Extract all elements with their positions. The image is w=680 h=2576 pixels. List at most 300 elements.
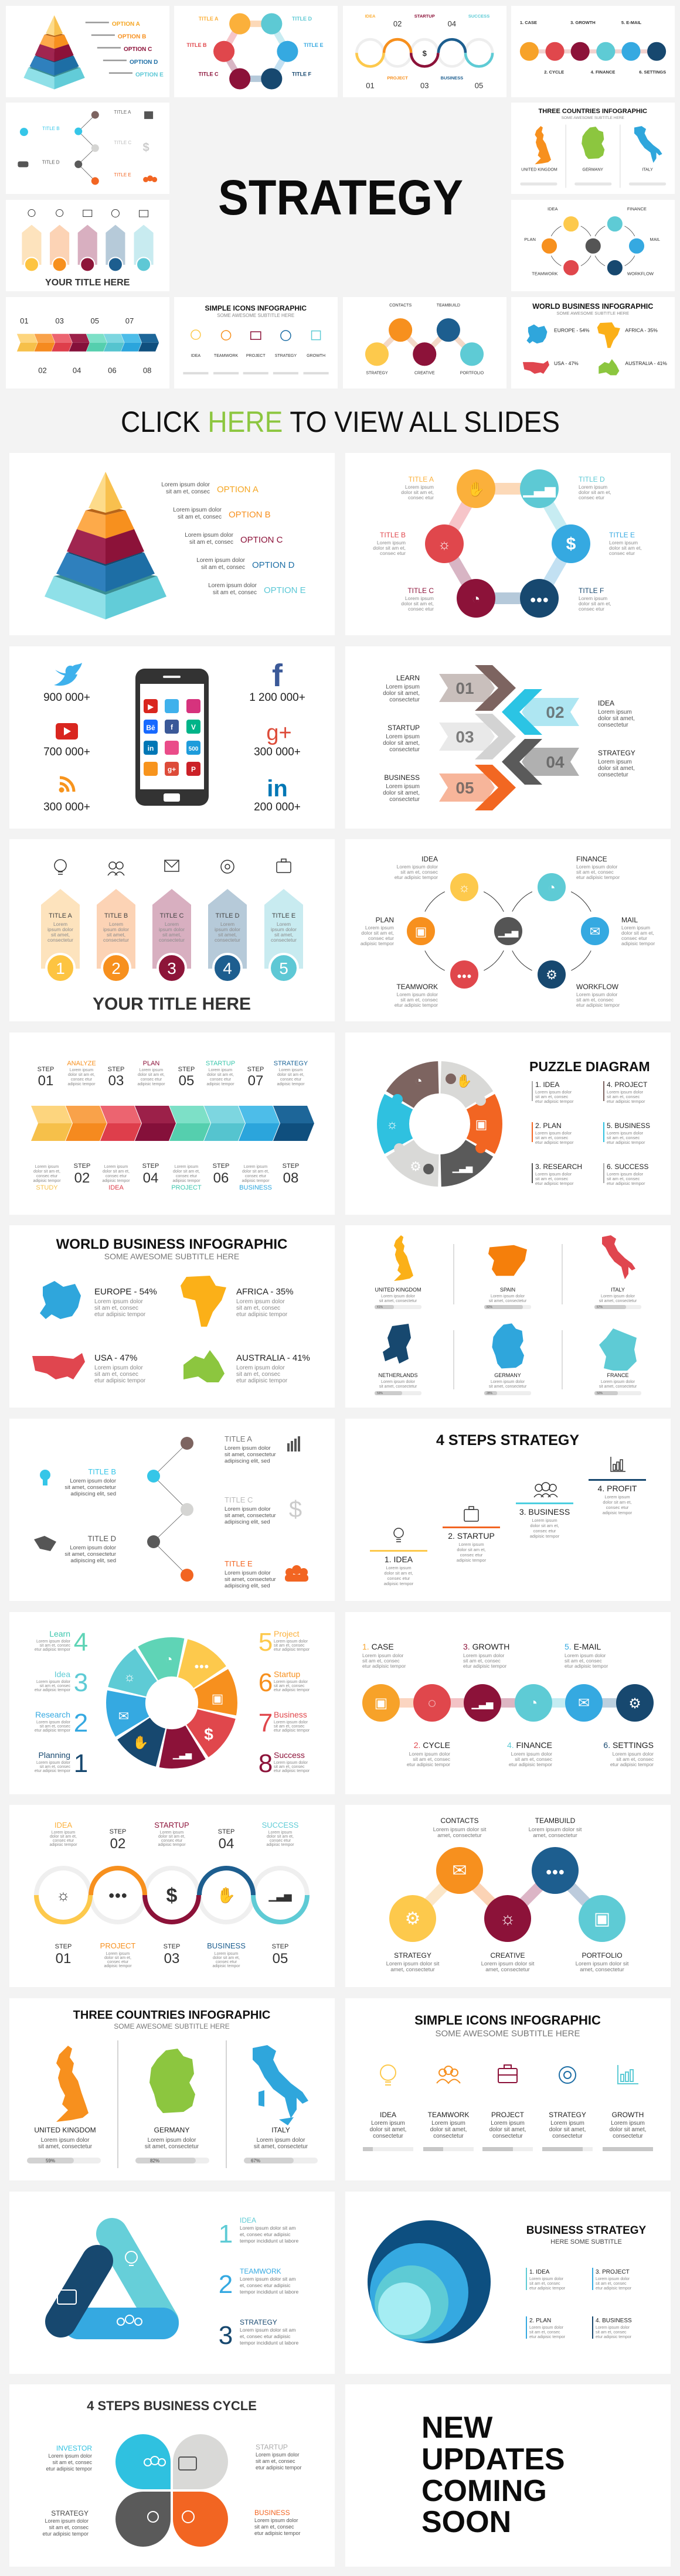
tree labels: TITLE C [225,1495,253,1504]
puzzle items: Lorem ipsum dolor [607,1130,644,1136]
numbered list: Lorem ipsum dolor sit am [240,2327,295,2333]
country labels and bars: Lorem ipsum dolor [491,1380,525,1384]
tree labels: TITLE B [88,1467,116,1476]
top labels: consec etur [161,1839,183,1843]
node labels: etur adipisic tempor [576,1002,620,1008]
country labels and bars: 67% [597,1306,603,1309]
ring labels: TITLE B [380,531,406,539]
icon labels: dolor sit amet, [370,2127,406,2133]
bottom labels: etur adipisic tempor [407,1761,450,1767]
bottom step labels: consec etur [106,1174,127,1178]
icon: phone with apps: 500 [189,746,199,752]
labels: amet, consectetur [437,1832,482,1839]
ring nodes: ▁▃▅ [522,482,556,498]
numbered list: Lorem ipsum dolor sit am [240,2225,295,2231]
top labels: Lorem ipsum [52,1831,75,1835]
labels: TEAMBUILD [535,1817,576,1825]
small card: pyramid: OPTION C [124,46,152,53]
progress bars: 59% [46,2158,55,2163]
strategy items: Lorem ipsum dolor [596,2277,630,2281]
network nodes: ●●● [457,971,472,980]
country labels and bars: 82% [487,1306,493,1309]
strategy items: etur adipisic tempor [529,2287,566,2291]
option labels: sit am et, consec [213,590,257,596]
ring labels: consec etur [408,606,434,612]
network circles: ⚙ [405,1909,420,1928]
arrow columns: consectetur [215,937,240,943]
network circles [389,1847,625,1942]
region stats: EUROPE - 54% [94,1287,157,1297]
arrow columns: TITLE D [216,912,240,919]
ring labels: dolor sit am et, [373,545,406,551]
bottom labels: adipisic tempor [104,1964,132,1968]
small card: idea ring: PLAN [524,237,536,242]
small card: ring diagram: TITLE B [186,42,207,48]
small card: three countries [511,103,675,194]
puzzle ring: ✋ [456,1074,472,1088]
cycle labels: Lorem ipsum dolor [48,2453,92,2459]
top step labels: adipisic tempor [277,1082,305,1086]
icon labels: consectetur [373,2133,404,2139]
bottom labels: Lorem ipsum [215,1952,238,1956]
top step labels: STEP [178,1066,195,1073]
tree labels: Lorem ipsum dolor [225,1570,271,1576]
cycle labels: sit am et, consec [52,2459,92,2465]
panel: 8 segment cycle [9,1612,335,1794]
step labels: 1. IDEA [385,1555,413,1564]
top labels: dolor sit am et, [50,1835,77,1839]
progress bars [363,2147,653,2151]
option labels: sit am et, consec [189,539,233,546]
step labels: adipisic tempor [530,1534,560,1539]
arrow columns: consectetur [159,937,185,943]
small card: world business: SOME AWESOME SUBTITLE HERE [556,311,629,316]
left labels: Lorem ipsum dolor [36,1680,71,1684]
icons [34,1436,308,1582]
bottom labels: PROJECT [100,1941,135,1950]
network nodes: ▣ [415,924,427,939]
cycle segments: ✋ [132,1735,149,1750]
country labels and bars: Lorem ipsum dolor [491,1294,525,1299]
country labels and bars [375,1287,641,1395]
timeline circles [362,1684,654,1722]
right labels: Business [274,1710,307,1719]
cycle segments: ▁▃▅ [172,1750,192,1760]
panel: 8 steps chevron bar [9,1033,335,1215]
arrow columns: sit amet, [218,932,237,938]
small card: pyramid: OPTION B [118,34,146,40]
ring nodes [425,469,590,618]
top labels: 04 [219,1836,234,1852]
connectors [413,1870,602,1919]
small card: contacts: TEAMBUILD [437,304,460,308]
small card: idea ring: FINANCE [627,206,647,212]
right labels: etur adipisic tempor [274,1688,310,1692]
puzzle items: sit am et, consec [607,1094,640,1099]
timeline circles: ▣ [375,1695,387,1711]
top step labels: STARTUP [206,1060,235,1067]
arrow columns: TITLE A [49,912,73,919]
number circles: 1 [56,959,65,977]
small card: pyramid: OPTION A [112,21,140,28]
subtitle: HERE SOME SUBTITLE [550,2238,622,2246]
step labels: Lorem ipsum [386,734,420,740]
top labels: STARTUP [154,1821,189,1829]
left labels: Planning [39,1750,70,1760]
panel: idea ring network [345,839,671,1021]
strategy items: 3. PROJECT [596,2269,630,2275]
icon labels: dolor sit amet, [430,2127,467,2133]
node labels: adipisic tempor [361,941,394,946]
step labels: dolor sit amet, [383,790,420,796]
puzzle items: 1. IDEA [535,1081,559,1089]
top labels: sit am et, consec [463,1658,501,1664]
icon: linkedin: in [267,776,288,802]
labels: Lorem ipsum dolor sit [386,1961,440,1967]
strategy items: sit am et, consec [529,2282,560,2286]
labels: CREATIVE [490,1951,525,1960]
top labels: STEP [218,1828,234,1835]
region stats: sit am et, consec [94,1305,138,1311]
node labels: TEAMWORK [396,983,438,991]
top labels: consec etur [270,1839,291,1843]
cycle segments: ☼ [124,1669,135,1684]
icon: phone with apps [135,669,209,806]
ring labels: Lorem ipsum [405,595,434,601]
small card: world business: USA - 47% [554,360,579,366]
bottom step labels: adipisic tempor [172,1179,200,1183]
cycle labels: BUSINESS [254,2509,290,2517]
timeline circles: ✉ [578,1695,590,1711]
labels: amet, consectetur [533,1832,577,1839]
option labels: OPTION A [217,485,259,495]
step labels: IDEA [598,699,614,707]
node labels: Lorem ipsum [621,925,650,931]
bottom labels: 01 [56,1951,71,1967]
cycle labels: Lorem ipsum dolor [45,2518,89,2524]
panel: 4 steps strategy [345,1419,671,1601]
arrow columns: Lorem [277,921,291,927]
bottom labels: 4. FINANCE [507,1740,552,1750]
cycle segments: ●●● [194,1661,209,1671]
icon labels: IDEA [380,2111,396,2119]
node labels: PLAN [376,916,394,924]
puzzle items: Lorem ipsum dolor [535,1130,572,1136]
bottom labels: sit am et, consec [413,1756,451,1762]
region stats: Lorem ipsum dolor [94,1299,143,1305]
small card: idea steps: IDEA [365,13,376,19]
arrow columns: Lorem [220,921,234,927]
left labels: etur adipisic tempor [35,1648,71,1652]
node labels: IDEA [421,855,438,863]
small card: 8 steps chevrons: 03 [55,316,64,325]
heading: YOUR TITLE HERE [93,994,251,1014]
arrow columns: sit amet, [274,932,293,938]
small card: 8 steps chevrons: 06 [108,366,117,374]
labels: PORTFOLIO [582,1951,623,1960]
small card: 8 steps chevrons: 02 [38,366,47,374]
top labels: consec etur [53,1839,74,1843]
map: france [599,1328,637,1371]
small card: case circles: 4. FINANCE [591,69,615,74]
bottom labels: sit am et, consec [515,1756,553,1762]
map: europe [40,1281,81,1319]
ring nodes: ☼ [438,537,451,553]
node labels: etur adipisic tempor [576,874,620,880]
outline icons [380,2065,638,2085]
progress bars [27,2158,318,2163]
left labels: 1 [74,1749,88,1778]
small card: ring diagram [174,6,338,97]
tree labels: TITLE D [88,1534,116,1543]
puzzle items: 3. RESEARCH [535,1163,582,1171]
option labels: Lorem ipsum dolor [208,582,257,589]
small card: titles tree [6,103,169,194]
puzzle items: sit am et, consec [607,1135,640,1140]
map: netherlands [383,1324,411,1364]
right labels: Project [274,1629,300,1638]
bottom step labels: STEP [283,1163,299,1170]
tree labels: sit amet, consectetur [225,1512,276,1519]
left labels: Research [35,1710,70,1719]
icon: phone with apps: V [191,723,196,731]
bottom step labels: dolor sit am et, [103,1170,130,1174]
small card: simple icons: SIMPLE ICONS INFOGRAPHIC [205,304,307,312]
labels: amet, consectetur [485,1967,530,1973]
country labels and bars: Lorem ipsum dolor [601,1380,635,1384]
step labels: consec etur [387,1576,410,1581]
step labels: dolor sit am et, [384,1570,413,1576]
network nodes: ☼ [458,880,470,895]
puzzle ring: ☼ [386,1117,398,1132]
country labels: Lorem ipsum dolor [41,2137,90,2144]
callout text: SOON [421,2505,511,2539]
cycle labels: etur adipisic tempor [46,2466,92,2472]
bottom labels: Lorem ipsum dolor [409,1751,450,1757]
strategy items: Lorem ipsum dolor [529,2326,564,2330]
node labels: sit am et, consec [400,997,438,1003]
ring labels: consec etur [380,550,406,556]
top step labels: Lorem ipsum [70,1068,93,1072]
icon: google plus: g+ [266,721,292,745]
node labels: etur adipisic tempor [395,1002,438,1008]
region stats: sit am et, consec [236,1371,280,1378]
ring labels: dolor sit am et, [401,489,434,495]
puzzle ring: ▣ [475,1117,487,1132]
subtitle: SOME AWESOME SUBTITLE HERE [114,2022,230,2030]
small card: world business: WORLD BUSINESS INFOGRAPHIC [532,302,653,311]
heading: WORLD BUSINESS INFOGRAPHIC [56,1236,287,1252]
left labels: 4 [74,1628,88,1657]
small card: ring diagram: TITLE E [304,42,324,48]
country labels and bars: GERMANY [494,1372,521,1378]
left labels: etur adipisic tempor [35,1688,71,1692]
top step labels: adipisic tempor [137,1082,165,1086]
step labels: 3. BUSINESS [519,1507,570,1517]
puzzle items: Lorem ipsum dolor [607,1089,644,1095]
puzzle items: etur adipisic tempor [607,1181,645,1186]
small card: 8 steps chevrons: 04 [73,366,81,374]
labels: Lorem ipsum dolor sit [529,1827,582,1833]
map: germany [492,1323,524,1368]
labels: amet, consectetur [580,1967,624,1973]
numbered list: tempor incididunt ut labore [240,2238,298,2244]
top step labels: STRATEGY [274,1060,308,1067]
step labels: consectetur [598,722,628,728]
country labels and bars: 28% [487,1392,493,1395]
tree labels: adipiscing elit, sed [225,1519,270,1525]
small card: titles tree: $ [143,141,149,154]
step labels: adipisic tempor [384,1581,414,1586]
map: spain [488,1245,527,1276]
node labels: sit am et, consec [576,997,614,1003]
bottom step labels: 06 [213,1170,229,1186]
arrow columns: ipsum dolor [159,926,185,932]
arrow columns: ipsum dolor [271,926,297,932]
puzzle items: Lorem ipsum dolor [535,1089,572,1095]
petals [115,2434,228,2547]
top step labels: 01 [38,1073,53,1089]
bottom step labels: Lorem ipsum [35,1165,59,1169]
number circles: 2 [111,959,121,977]
country labels and bars: sit amet, consectetur [379,1299,417,1303]
ring labels: Lorem ipsum [377,540,406,546]
icon labels: Lorem ipsum [611,2120,645,2127]
cycle labels: etur adipisic tempor [42,2531,89,2537]
stat: twitter: 900 000+ [43,691,90,704]
icon: phone with apps: ▶ [147,703,154,711]
left labels: 2 [74,1709,88,1737]
bottom step labels: PROJECT [171,1184,202,1191]
ring nodes: ✋ [467,481,485,498]
tree labels: adipiscing elit, sed [225,1458,270,1464]
panel: 4 steps business cycle [9,2384,335,2567]
top step labels: adipisic tempor [206,1082,234,1086]
pyramid [45,472,166,619]
ring nodes: $ [566,534,576,554]
icon labels: dolor sit amet, [549,2127,586,2133]
cycle labels: sit am et, consec [256,2458,295,2464]
ring nodes: ◔ [472,591,480,607]
top step labels: STEP [38,1066,54,1073]
bottom step labels: STUDY [36,1184,58,1191]
step labels: consec etur [533,1528,556,1534]
country labels and bars: sit amet, consectetur [379,1385,417,1389]
bottom step labels [33,1163,299,1191]
step labels: Lorem ipsum [604,1494,630,1500]
region stats: Lorem ipsum dolor [236,1365,285,1371]
puzzle items: sit am et, consec [535,1135,569,1140]
callout text: NEW [421,2411,493,2445]
icon labels: dolor sit amet, [489,2127,526,2133]
network nodes [404,870,612,991]
puzzle items: etur adipisic tempor [535,1099,574,1104]
small card: world business [511,297,675,389]
top labels: 1. CASE [362,1642,394,1651]
small card: idea ring: TEAMWORK [532,271,558,276]
bottom step labels: STEP [74,1163,90,1170]
left labels: etur adipisic tempor [35,1769,71,1773]
top labels [362,1642,608,1669]
cycle segments: ✉ [118,1709,129,1723]
ring labels: consec etur [408,495,434,500]
puzzle items: 5. BUSINESS [607,1122,650,1130]
region stats: sit am et, consec [236,1305,280,1311]
bottom labels: Lorem ipsum dolor [511,1751,552,1757]
number circles [46,954,298,982]
small card: contacts: PORTFOLIO [460,371,484,375]
top step labels: adipisic tempor [67,1082,96,1086]
top step labels: dolor sit am et, [207,1073,234,1077]
option labels: Lorem ipsum dolor [173,507,222,513]
icon labels: consectetur [492,2133,523,2139]
bottom labels: STEP [272,1943,288,1950]
panel: puzzle diagram [345,1033,671,1215]
right labels: Success [274,1750,305,1760]
region stats: AFRICA - 35% [236,1287,294,1297]
ring labels: Lorem ipsum [579,595,607,601]
strategy items: 4. BUSINESS [596,2318,632,2324]
small card: three countries: GERMANY [583,168,603,172]
small card: ring diagram: TITLE D [292,16,312,22]
bottom labels [55,1941,288,1968]
top labels: 3. GROWTH [463,1642,509,1651]
cycle labels: INVESTOR [56,2444,92,2452]
arrow columns: TITLE B [104,912,128,919]
cycle labels: sit am et, consec [254,2524,294,2530]
icon labels: Lorem ipsum [491,2120,525,2127]
numbered list: tempor incididunt ut labore [240,2340,298,2346]
bottom labels: consec etur [107,1960,129,1964]
right labels: 7 [259,1709,273,1737]
icon labels: consectetur [433,2133,464,2139]
arrow columns: consectetur [271,937,297,943]
country labels and bars: sit amet, consectetur [599,1299,637,1303]
top step labels: consec etur [280,1078,302,1082]
puzzle ring: ◔ [414,1074,423,1088]
small card: contacts: CREATIVE [414,371,435,375]
subtitle: SOME AWESOME SUBTITLE HERE [435,2029,580,2039]
tree labels: adipiscing elit, sed [225,1583,270,1589]
small card: titles tree: TITLE A [114,110,131,115]
bottom step labels: 04 [143,1170,158,1186]
small card: contacts: CONTACTS [389,304,412,308]
node labels: Lorem ipsum dolor [397,991,438,997]
arrow columns: consectetur [103,937,129,943]
bottom step labels: consec etur [245,1174,267,1178]
tree labels: adipiscing elit, sed [70,1558,116,1564]
node labels: sit am et, consec [576,869,614,875]
step labels: dolor sit am et, [603,1500,632,1505]
map: usa [32,1353,85,1379]
numbered list: STRATEGY [240,2318,277,2326]
icon: phone with apps: f [171,723,174,731]
small card: three countries: UNITED KINGDOM [521,168,557,172]
chevron arrows: 03 [455,728,474,746]
labels: Lorem ipsum dolor sit [576,1961,629,1967]
icon labels: PROJECT [491,2111,525,2119]
step labels: Lorem ipsum [386,783,420,790]
ring labels: TITLE D [579,475,605,483]
panel: world business [9,1225,335,1408]
left labels: sit am et, consec [39,1765,70,1769]
arrow columns: Lorem [53,921,67,927]
top labels: SUCCESS [262,1821,299,1829]
stat: youtube: 700 000+ [43,746,90,758]
puzzle ring: ▁▃▅ [452,1163,473,1173]
bottom labels: etur adipisic tempor [509,1761,552,1767]
option labels: Lorem ipsum dolor [185,532,234,539]
